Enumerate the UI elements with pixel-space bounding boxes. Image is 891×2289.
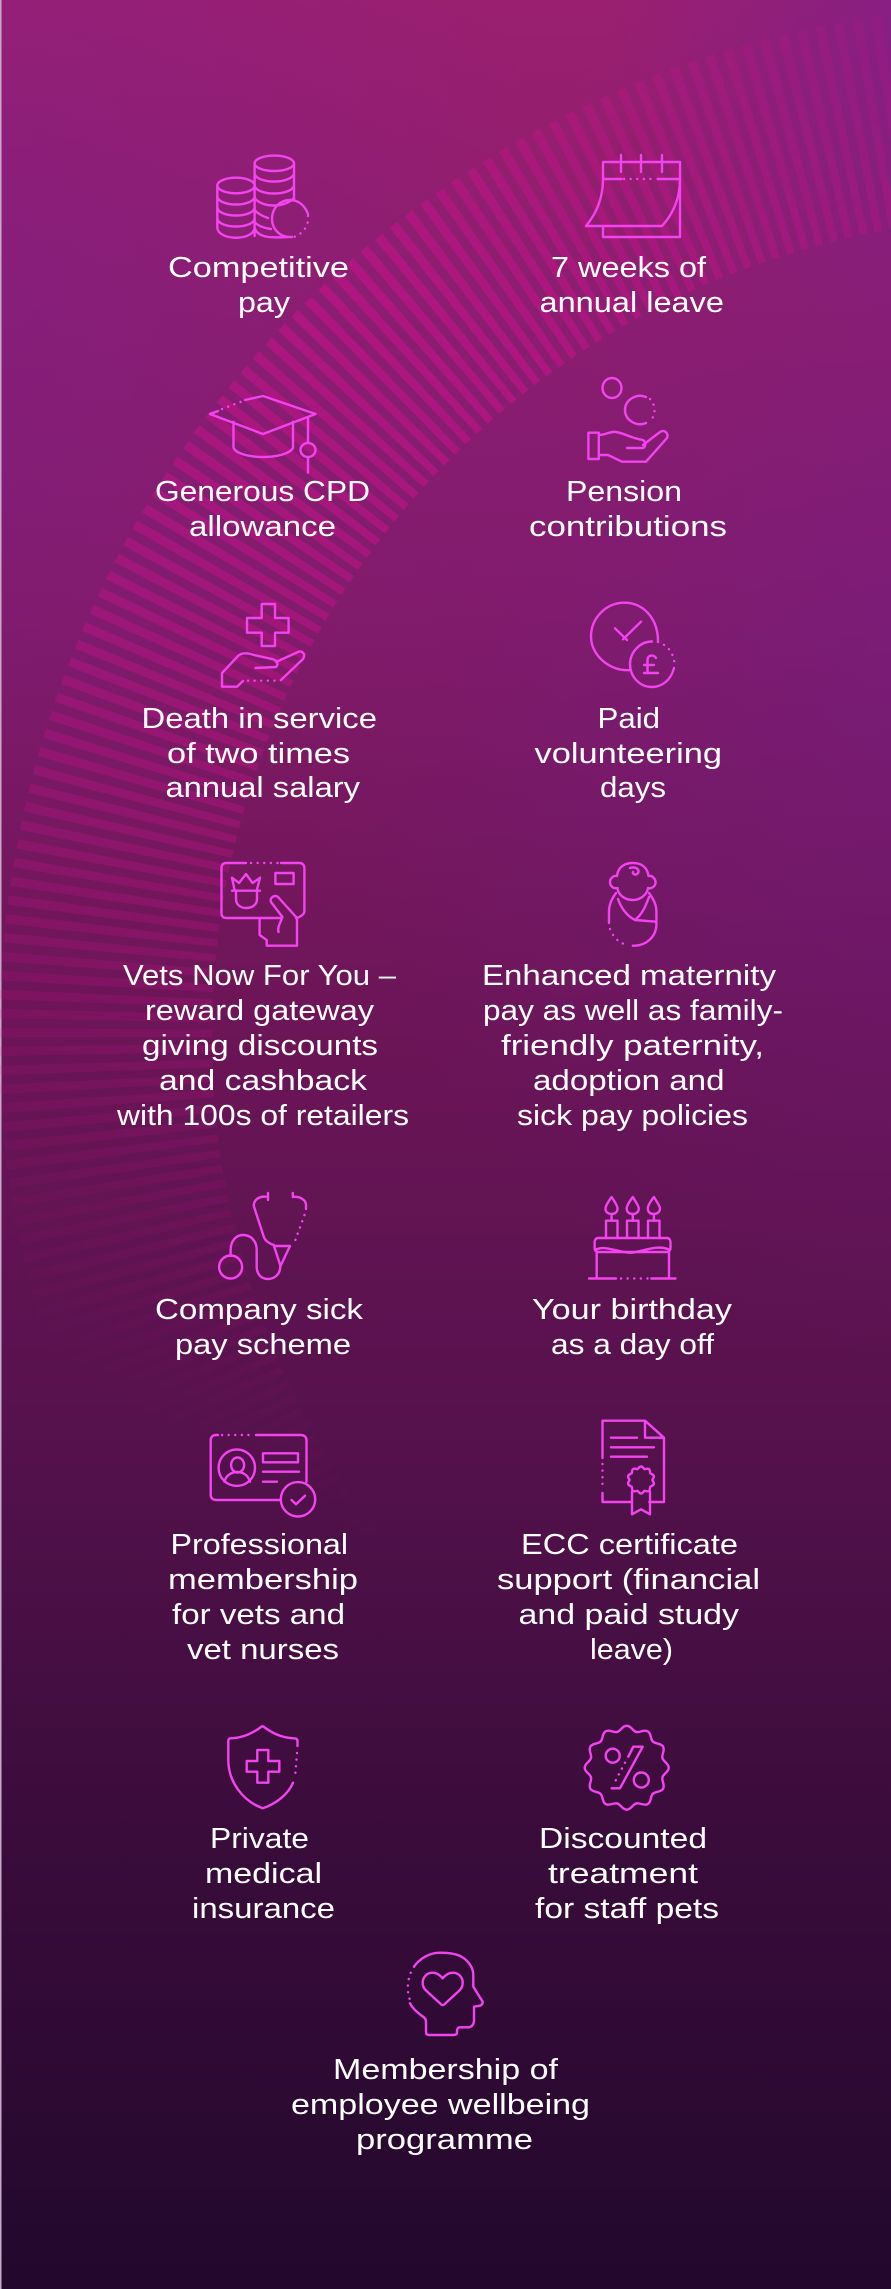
label: allowance bbox=[189, 511, 336, 543]
benefit: company sick pay bbox=[155, 1193, 364, 1361]
label: insurance bbox=[192, 1893, 335, 1925]
label: Competitive bbox=[168, 252, 349, 284]
label: Company sick bbox=[155, 1294, 364, 1326]
label: annual leave bbox=[540, 287, 724, 319]
label: Professional bbox=[170, 1529, 348, 1561]
benefit: professional membership bbox=[168, 1435, 358, 1666]
label: Your birthday bbox=[532, 1294, 733, 1326]
label: giving discounts bbox=[142, 1030, 378, 1062]
label: adoption and bbox=[533, 1065, 724, 1097]
benefit: private medical insurance bbox=[192, 1726, 335, 1925]
label: Enhanced maternity bbox=[482, 960, 777, 992]
label: volunteering bbox=[534, 738, 722, 770]
label: treatment bbox=[548, 1858, 698, 1890]
label: as a day off bbox=[551, 1329, 715, 1361]
label: pay bbox=[238, 287, 291, 319]
icon: calendar bbox=[586, 155, 680, 237]
label: and paid study bbox=[518, 1599, 740, 1631]
label: contributions bbox=[529, 511, 727, 543]
label: Paid bbox=[598, 703, 660, 735]
benefit: ECC certificate support bbox=[497, 1421, 760, 1666]
label: pay as well as family- bbox=[483, 995, 783, 1027]
icon: swaddled baby bbox=[609, 863, 656, 946]
label bbox=[529, 476, 727, 543]
label bbox=[155, 1294, 364, 1361]
label: ECC certificate bbox=[521, 1529, 738, 1561]
label bbox=[168, 1529, 358, 1666]
benefit: birthday day off bbox=[532, 1197, 733, 1361]
icon: head with heart bbox=[408, 1953, 483, 2035]
benefit: pension contributions bbox=[529, 378, 727, 543]
label: with 100s of retailers bbox=[116, 1100, 409, 1132]
benefit: paid volunteering days bbox=[534, 603, 722, 804]
label: medical bbox=[205, 1858, 322, 1890]
icon: percent badge bbox=[585, 1726, 669, 1810]
label: 7 weeks of bbox=[551, 252, 707, 284]
label: for vets and bbox=[172, 1599, 345, 1631]
label bbox=[482, 960, 783, 1132]
icon: clock and pound coin bbox=[591, 603, 674, 687]
striped arc decoration bbox=[106, 110, 891, 1964]
label: Vets Now For You – bbox=[123, 960, 397, 992]
label bbox=[142, 703, 377, 804]
label: for staff pets bbox=[535, 1893, 719, 1925]
label bbox=[116, 960, 409, 1132]
label: membership bbox=[168, 1564, 358, 1596]
label: vet nurses bbox=[187, 1634, 339, 1666]
label: friendly paternity, bbox=[501, 1030, 764, 1062]
icon: hand with medical cross bbox=[222, 604, 304, 687]
label: Generous CPD bbox=[155, 476, 370, 508]
benefit: Vets Now For You bbox=[116, 863, 409, 1132]
label bbox=[532, 1294, 733, 1361]
benefit: discounted treatment for staff pets bbox=[535, 1726, 719, 1925]
label: employee wellbeing bbox=[291, 2089, 590, 2121]
label: programme bbox=[356, 2124, 533, 2156]
benefit: death in service bbox=[142, 604, 377, 804]
label: Private bbox=[210, 1823, 309, 1855]
benefit: competitive pay bbox=[168, 156, 349, 319]
label: leave) bbox=[590, 1634, 673, 1666]
icon: graduation cap bbox=[210, 396, 316, 473]
icon: shield with cross bbox=[228, 1726, 298, 1808]
label bbox=[168, 252, 349, 319]
label: annual salary bbox=[166, 772, 361, 804]
label bbox=[534, 703, 722, 804]
icon: stethoscope bbox=[219, 1193, 306, 1279]
label bbox=[497, 1529, 760, 1666]
label bbox=[192, 1823, 335, 1925]
icon: membership ID card bbox=[211, 1435, 315, 1517]
icon: hand with coins bbox=[588, 378, 667, 462]
label: Death in service bbox=[142, 703, 377, 735]
benefit: employee wellbeing programme bbox=[291, 1953, 590, 2156]
icon: reward card in hand bbox=[222, 863, 304, 946]
label: Pension bbox=[566, 476, 682, 508]
label: of two times bbox=[167, 738, 350, 770]
label bbox=[155, 476, 370, 543]
label bbox=[540, 252, 724, 319]
benefit: CPD allowance bbox=[155, 396, 370, 543]
label: reward gateway bbox=[145, 995, 375, 1027]
benefit: enhanced maternity pay bbox=[482, 863, 783, 1132]
label bbox=[535, 1823, 719, 1925]
label: and cashback bbox=[159, 1065, 368, 1097]
icon: birthday cake bbox=[589, 1197, 676, 1278]
label: sick pay policies bbox=[517, 1100, 748, 1132]
benefit: annual leave bbox=[540, 155, 724, 319]
label: pay scheme bbox=[175, 1329, 351, 1361]
label: Discounted bbox=[539, 1823, 707, 1855]
label: Membership of bbox=[333, 2054, 559, 2086]
label: support (financial bbox=[497, 1564, 760, 1596]
label bbox=[291, 2054, 590, 2156]
label: days bbox=[600, 772, 666, 804]
icon: coin stacks bbox=[217, 156, 308, 238]
icon: certificate bbox=[602, 1421, 664, 1514]
